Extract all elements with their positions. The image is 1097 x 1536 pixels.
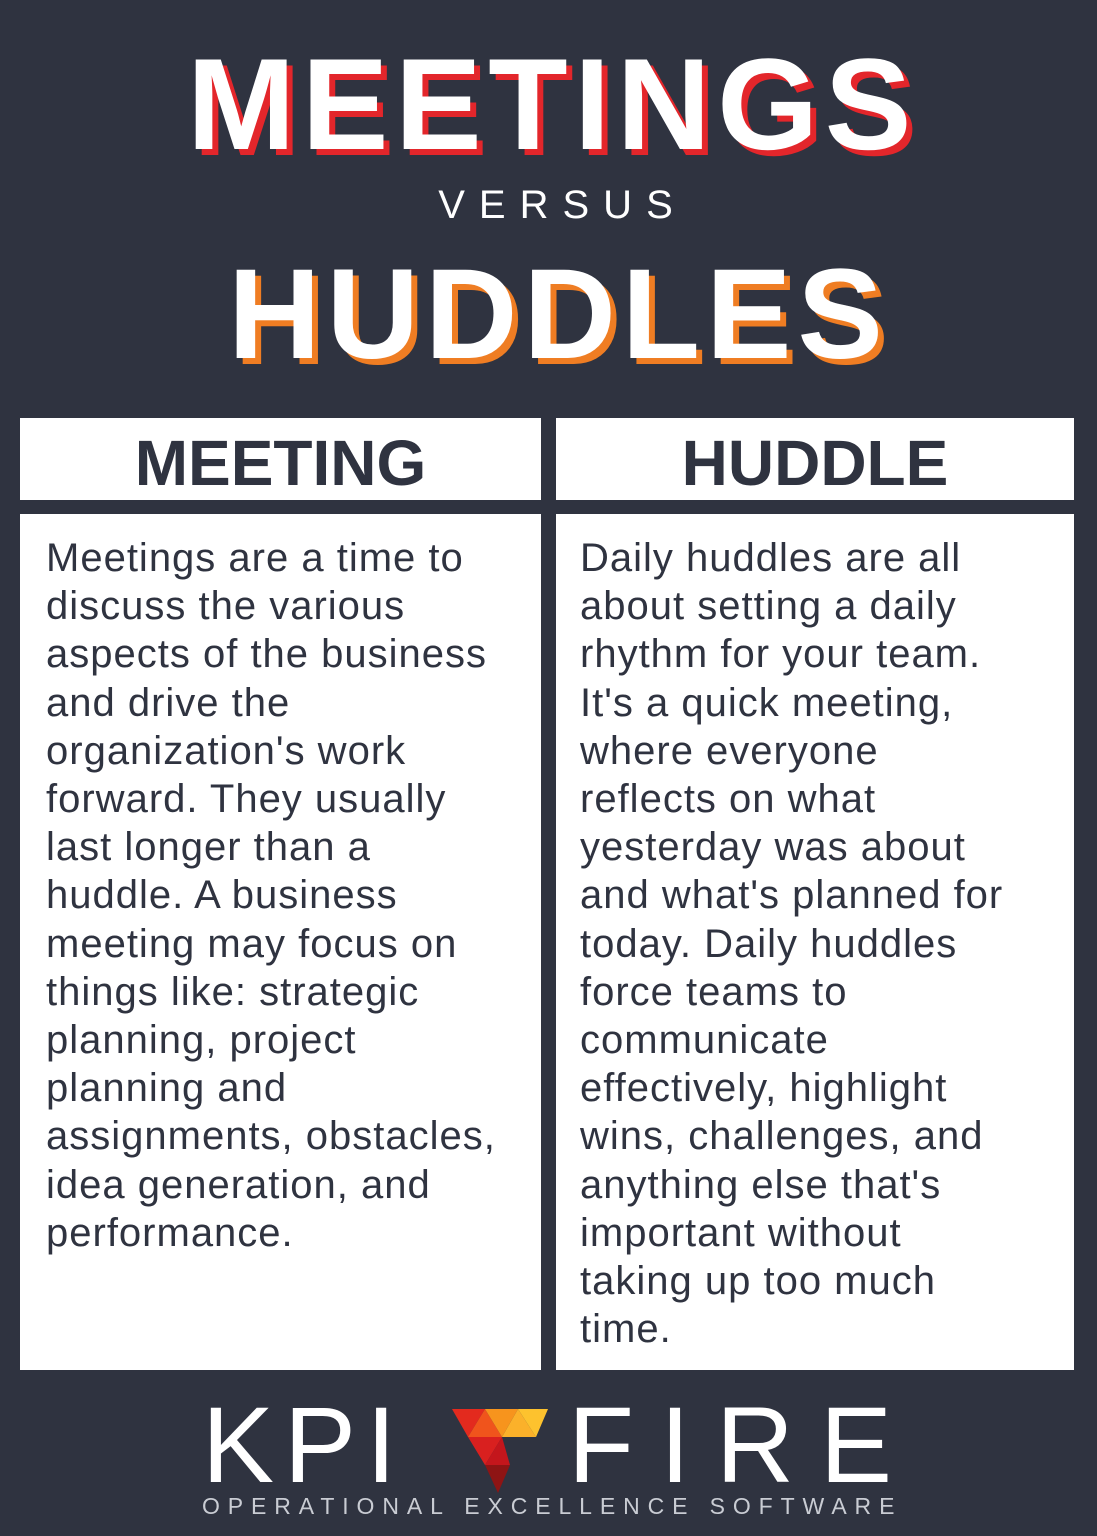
header: meeting: MEETING (135, 427, 426, 499)
logo text FIRE: FIRE (568, 1384, 918, 1505)
text: huddle description: and what's planned for (580, 873, 1003, 917)
title: meetings: MEETINGS (187, 31, 918, 177)
header: meeting (20, 418, 541, 500)
text: huddle description: wins, challenges, and (580, 1114, 983, 1158)
logo text KPI: KPI (202, 1384, 406, 1505)
text: meeting description: things like: strategic (46, 970, 419, 1014)
text: meeting description: last longer than a (46, 825, 371, 869)
text: huddle description: taking up too much (580, 1259, 936, 1303)
text: meeting description: discuss the various (46, 584, 405, 628)
text: huddle description: where everyone (580, 729, 879, 773)
text: meeting description: and drive the (46, 681, 290, 725)
text: huddle description: yesterday was about (580, 825, 966, 869)
text: huddle description: about setting a daily (580, 584, 957, 628)
panel: huddle description (556, 514, 1074, 1370)
text: meeting description: planning, project (46, 1018, 357, 1062)
text: huddle description: rhythm for your team. (580, 632, 981, 676)
title: huddles: HUDDLES (228, 243, 889, 386)
text: meeting description: idea generation, and (46, 1163, 431, 1207)
text: meeting description: planning and (46, 1066, 287, 1110)
text: huddle description: anything else that's (580, 1163, 941, 1207)
text: meeting description: organization's work (46, 729, 406, 773)
text: huddle description: important without (580, 1211, 902, 1255)
text: meeting description: assignments, obstacles, (46, 1114, 496, 1158)
text: huddle description: reflects on what (580, 777, 876, 821)
text: meeting description: performance. (46, 1211, 294, 1255)
header: huddle (556, 418, 1074, 500)
tagline: OPERATIONAL EXCELLENCE SOFTWARE (202, 1493, 902, 1519)
text: huddle description: force teams to (580, 970, 847, 1014)
text: huddle description: Daily huddles are all (580, 536, 961, 580)
text: huddle description: today. Daily huddles (580, 922, 957, 966)
text: huddle description: communicate (580, 1018, 829, 1062)
icon: flame triangle (452, 1409, 548, 1493)
text: meeting description: huddle. A business (46, 873, 398, 917)
text: meeting description: meeting may focus on (46, 922, 457, 966)
text: meeting description: forward. They usually (46, 777, 446, 821)
text: meeting description (46, 536, 496, 1255)
panel: meeting description (20, 514, 541, 1370)
logo: KPI FIRE (202, 1384, 918, 1519)
text: huddle description: It's a quick meeting, (580, 681, 953, 725)
text: huddle description: time. (580, 1307, 672, 1351)
text: meeting description: aspects of the business (46, 632, 487, 676)
text: huddle description: effectively, highlight (580, 1066, 947, 1110)
subtitle: versus: VERSUS (438, 183, 687, 227)
text: meeting description: Meetings are a time to (46, 536, 464, 580)
text: huddle description (580, 536, 1003, 1351)
header: huddle: HUDDLE (682, 427, 948, 499)
